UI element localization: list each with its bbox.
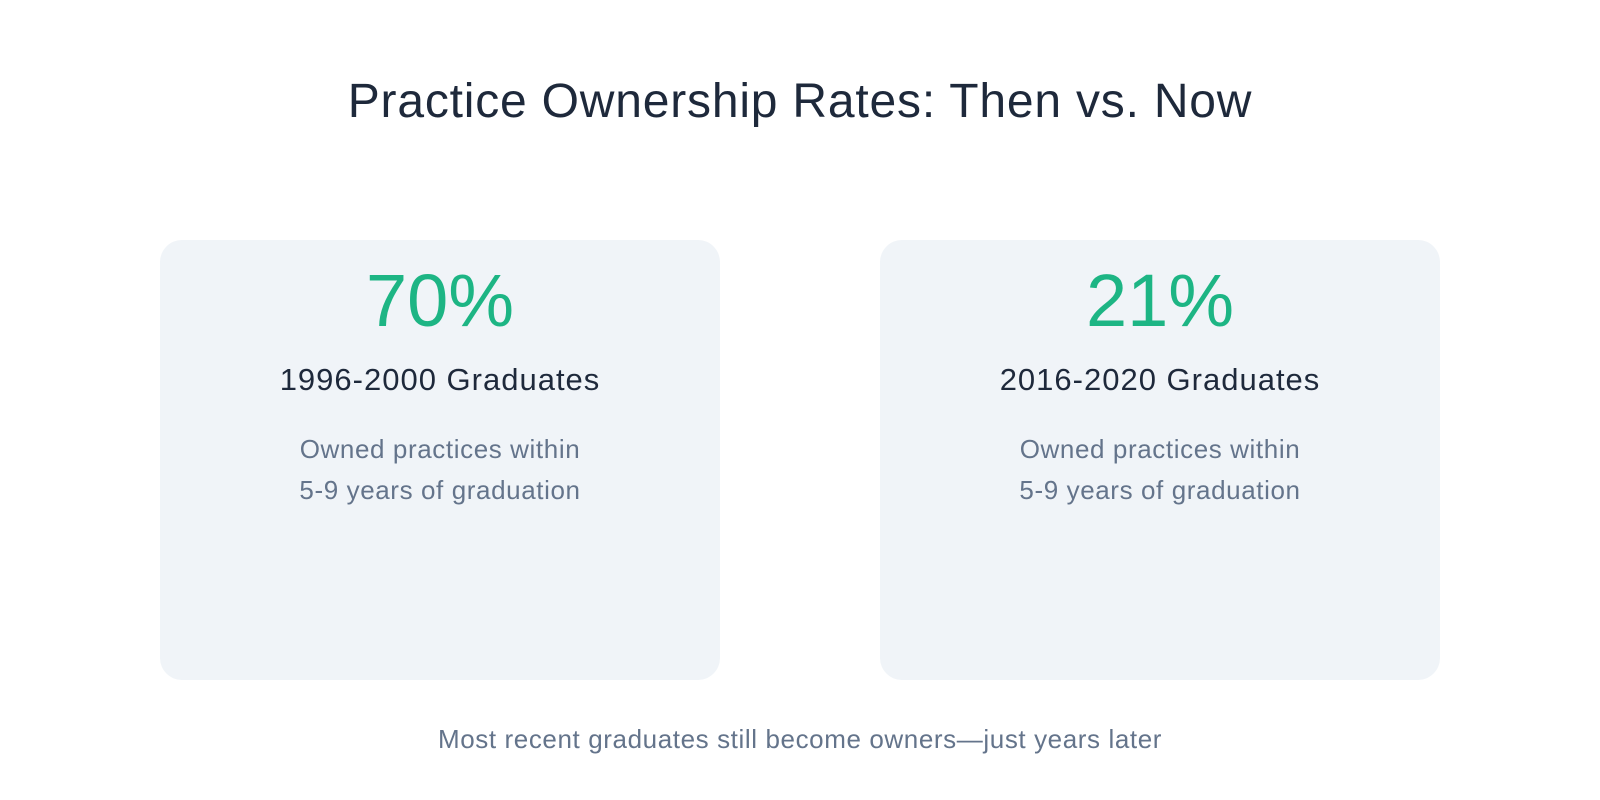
text: description: 5-9 years of graduation	[1019, 475, 1301, 505]
text: description: Owned practices within	[300, 434, 580, 464]
panel: 1996-2000 graduates	[160, 240, 720, 680]
text: description	[299, 434, 581, 505]
text: description	[1019, 434, 1301, 505]
text: description: 5-9 years of graduation	[299, 475, 581, 505]
text: description: Owned practices within	[1020, 434, 1300, 464]
heading: 2016-2020 Graduates: 2016-2020 Graduates	[1000, 362, 1320, 397]
stat: 70%: 70%	[366, 259, 514, 342]
footer note: Most recent graduates still become owners—just years later	[438, 724, 1162, 754]
heading: 1996-2000 Graduates: 1996-2000 Graduates	[280, 362, 600, 397]
title: Practice Ownership Rates: Then vs. Now	[348, 75, 1252, 128]
stat: 21%: 21%	[1086, 259, 1234, 342]
panel: 2016-2020 graduates	[880, 240, 1440, 680]
